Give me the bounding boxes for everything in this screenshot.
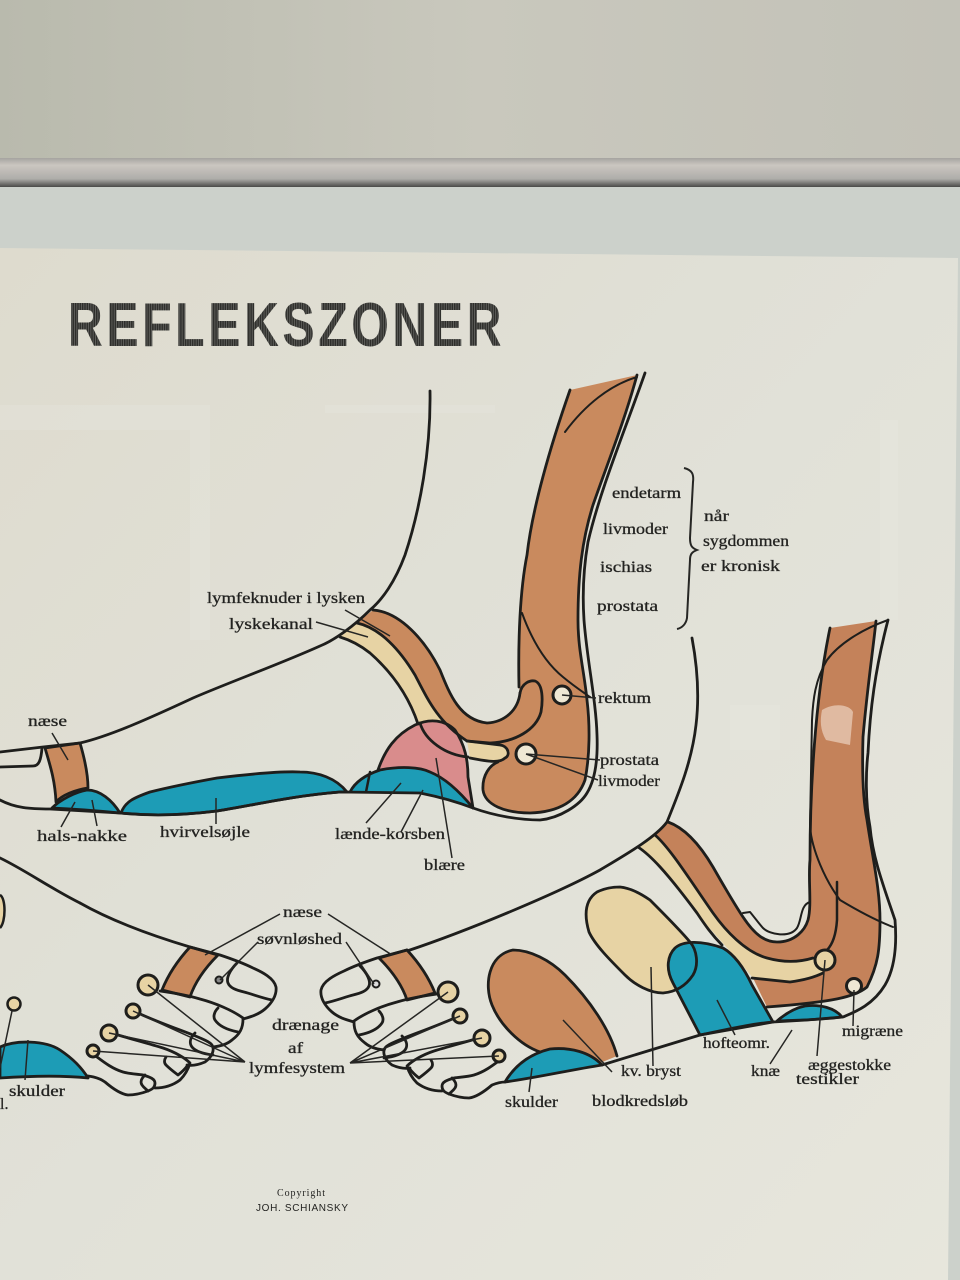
labels: upper foot: prostata: [600, 752, 659, 769]
labels: upper foot: er kronisk: [701, 558, 780, 575]
outlines: [0, 391, 430, 752]
zone: neck (teal): [52, 790, 120, 813]
insomnia point: [372, 980, 380, 988]
lymph points: [87, 975, 158, 1057]
labels: upper foot: hvirvelsøjle: [160, 824, 250, 841]
labels: upper foot: lyskekanal: [229, 616, 314, 633]
zone: groin canal (tan): [638, 835, 823, 982]
lymph leader lines: [93, 985, 245, 1062]
labels: lower feet: hofteomr.: [703, 1035, 770, 1052]
labels: lower feet: testikler: [796, 1071, 860, 1088]
foot 3: sole, left: [80, 903, 276, 1095]
zone: leg and heel (brown): [357, 375, 637, 813]
toe lines: [354, 994, 437, 1021]
toe lines: [160, 991, 243, 1018]
labels: lower feet: skulder: [9, 1083, 66, 1100]
labels: upper foot: lymfeknuder i lysken: [207, 590, 365, 607]
labels: upper foot: [28, 485, 789, 874]
foot 4: sole, right: [321, 950, 505, 1098]
reflex point: prostate: [516, 744, 536, 764]
labels: lower feet: [0, 904, 903, 1113]
labels: upper foot: når: [704, 508, 730, 525]
labels: upper foot: næse: [28, 713, 67, 730]
labels: lower feet: drænage: [272, 1017, 339, 1034]
leader: [0, 1011, 28, 1080]
labels: lower feet: skulder: [505, 1094, 559, 1111]
outline: [0, 858, 80, 903]
labels: lower feet: migræne: [842, 1023, 903, 1040]
labels: lower feet: søvnløshed: [257, 931, 342, 948]
zone: knee (teal): [777, 1005, 842, 1021]
zone: spine (teal): [121, 772, 347, 815]
labels: upper foot: hals-nakke: [37, 828, 127, 845]
foot fragment: far left: [0, 858, 88, 1080]
glass reflections: [0, 405, 898, 750]
reflex point: rectum: [553, 686, 571, 704]
copyright: JOH. SCHIANSKY: [256, 1203, 348, 1214]
wall background: [0, 0, 960, 160]
glare on leg: [821, 705, 853, 745]
reflex point: ovaries: [815, 950, 835, 970]
title: REFLEKSZONER: [68, 290, 502, 359]
labels: upper foot: ischias: [600, 559, 652, 576]
labels: lower feet: af: [288, 1040, 304, 1057]
zone: hip (teal): [668, 942, 773, 1035]
labels: lower feet: næse: [283, 904, 322, 921]
lymph points: [438, 982, 505, 1062]
toe outline: big toe: [321, 950, 407, 1050]
zone: toe nose band (brown): [45, 743, 88, 802]
labels: lower feet: æggestokke: [808, 1057, 891, 1074]
labels: lower feet: lymfesystem: [249, 1060, 346, 1077]
zone: nose band (brown): [379, 950, 435, 1000]
zone: nose band (brown): [162, 947, 218, 997]
zone: shoulder (teal): [0, 1042, 88, 1078]
zone: bladder (pink): [378, 721, 473, 808]
labels: lower feet: knæ: [751, 1063, 780, 1080]
labels: upper foot: sygdommen: [703, 533, 789, 550]
labels: upper foot: prostata: [597, 598, 658, 615]
labels: upper foot: blære: [424, 857, 465, 874]
partial point: [0, 895, 4, 928]
bracket: [677, 468, 697, 629]
copyright: Copyright: [277, 1188, 325, 1199]
toe outline: big toe: [80, 903, 276, 1047]
labels: lower feet: kv. bryst: [621, 1063, 682, 1080]
labels: upper foot: livmoder: [603, 521, 669, 538]
labels: upper foot: rektum: [598, 690, 652, 707]
insomnia point: [216, 976, 222, 984]
zone: leg and heel (brown): [655, 621, 880, 1007]
zone: lumbar (teal): [350, 768, 473, 808]
lymph leader lines: [350, 992, 499, 1063]
zone: chest oval (tan): [586, 887, 697, 993]
reflex point: migraine: [846, 978, 862, 994]
zone: groin canal (tan): [340, 623, 467, 741]
copyright: [256, 1188, 348, 1214]
zone: blood circulation oval (brown): [488, 950, 617, 1063]
zone: bar (tan): [467, 741, 508, 761]
labels: upper foot: endetarm: [612, 485, 682, 502]
foot 2: side view, lower right: [407, 620, 896, 1082]
labels: upper foot: livmoder: [598, 773, 661, 790]
point: [8, 998, 20, 1010]
labels: upper foot: lænde-korsben: [335, 826, 445, 843]
labels: lower feet: blodkredsløb: [592, 1093, 688, 1110]
leader lines: [52, 610, 854, 1092]
labels: lower feet: l.: [0, 1096, 8, 1113]
zone: shoulder right (teal): [505, 1049, 602, 1082]
foot 1: side view, upper: [0, 373, 645, 820]
frame rod: [0, 158, 960, 187]
outlines: [407, 638, 698, 951]
